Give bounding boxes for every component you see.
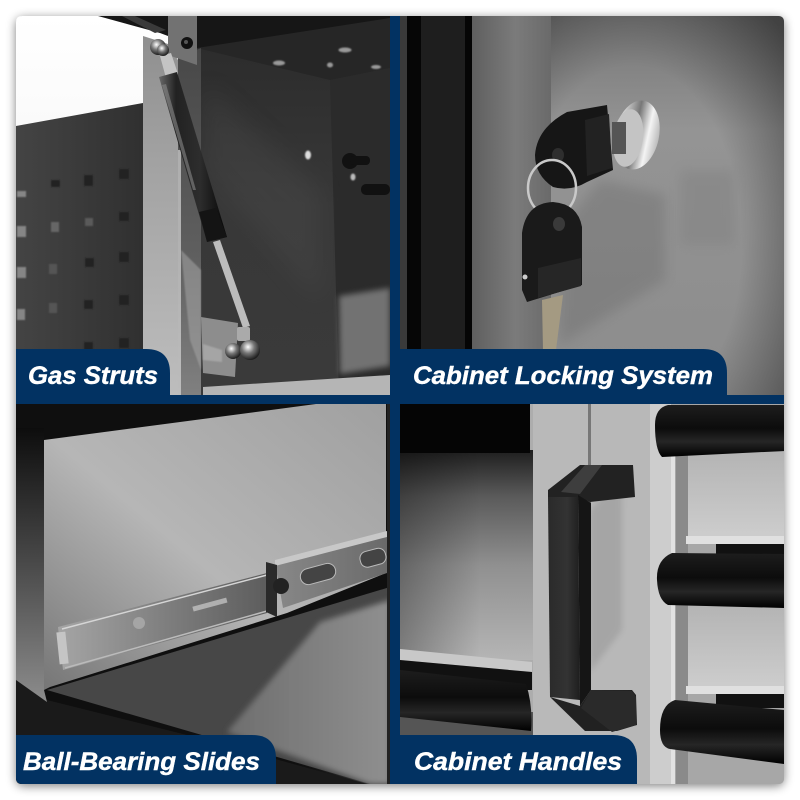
lock cylinder xyxy=(612,100,660,170)
floor light xyxy=(227,600,390,784)
label: gas struts: Gas Struts xyxy=(28,362,158,390)
upper key fob xyxy=(535,105,613,189)
ceiling of interior xyxy=(248,18,390,80)
panel: cabinet handles xyxy=(400,404,784,784)
vertical cabinet handle xyxy=(548,465,637,732)
floor front edge xyxy=(16,680,367,784)
label: ball-bearing slides: Ball-Bearing Slides xyxy=(23,748,260,776)
interior highlights xyxy=(273,48,381,180)
panel: cabinet locking system xyxy=(400,16,784,395)
label: cabinet handles xyxy=(400,735,637,784)
upper bracket xyxy=(168,16,197,65)
grey area below handle xyxy=(400,712,533,742)
top underside xyxy=(98,16,390,48)
cabinet interior xyxy=(197,38,390,395)
grey frame xyxy=(472,16,551,349)
key ring xyxy=(528,160,576,216)
panel edge xyxy=(387,404,390,784)
gas strut xyxy=(150,39,260,360)
lower key blade xyxy=(542,295,563,350)
label: gas struts xyxy=(16,349,170,395)
light streak xyxy=(205,85,320,300)
left drawer face xyxy=(400,404,533,660)
label: cabinet handles: Cabinet Handles xyxy=(414,748,622,776)
label: ball-bearing slides xyxy=(16,735,276,784)
lower bracket xyxy=(201,317,238,377)
post inner side xyxy=(178,48,201,395)
left drawer lip xyxy=(400,649,532,672)
interior corner panel xyxy=(332,133,390,378)
left drawer handle xyxy=(400,670,531,731)
panel: gas struts xyxy=(16,16,390,395)
right recess xyxy=(671,404,784,784)
key shadow on door xyxy=(560,180,665,345)
post edge xyxy=(178,150,181,395)
drawer floor xyxy=(47,587,390,784)
right drawer faces xyxy=(686,452,784,708)
lower key fob xyxy=(522,202,582,302)
centre column xyxy=(533,404,671,784)
label: cabinet locking system xyxy=(400,349,727,395)
black door frame xyxy=(400,16,472,349)
drawer inner wall xyxy=(44,404,386,690)
door vignette xyxy=(551,16,784,395)
pegboard xyxy=(16,103,143,349)
post face xyxy=(143,36,178,395)
label: cabinet locking system: Cabinet Locking System xyxy=(413,362,713,390)
right drawer handles xyxy=(655,405,784,764)
vertical handle shadow xyxy=(590,475,622,672)
sheen on back wall xyxy=(339,288,390,374)
interior knob xyxy=(342,153,390,195)
drawer side xyxy=(16,428,47,702)
slide rail xyxy=(56,531,388,670)
panel: ball-bearing slides xyxy=(16,404,390,784)
bottom shelf lip xyxy=(203,375,390,395)
